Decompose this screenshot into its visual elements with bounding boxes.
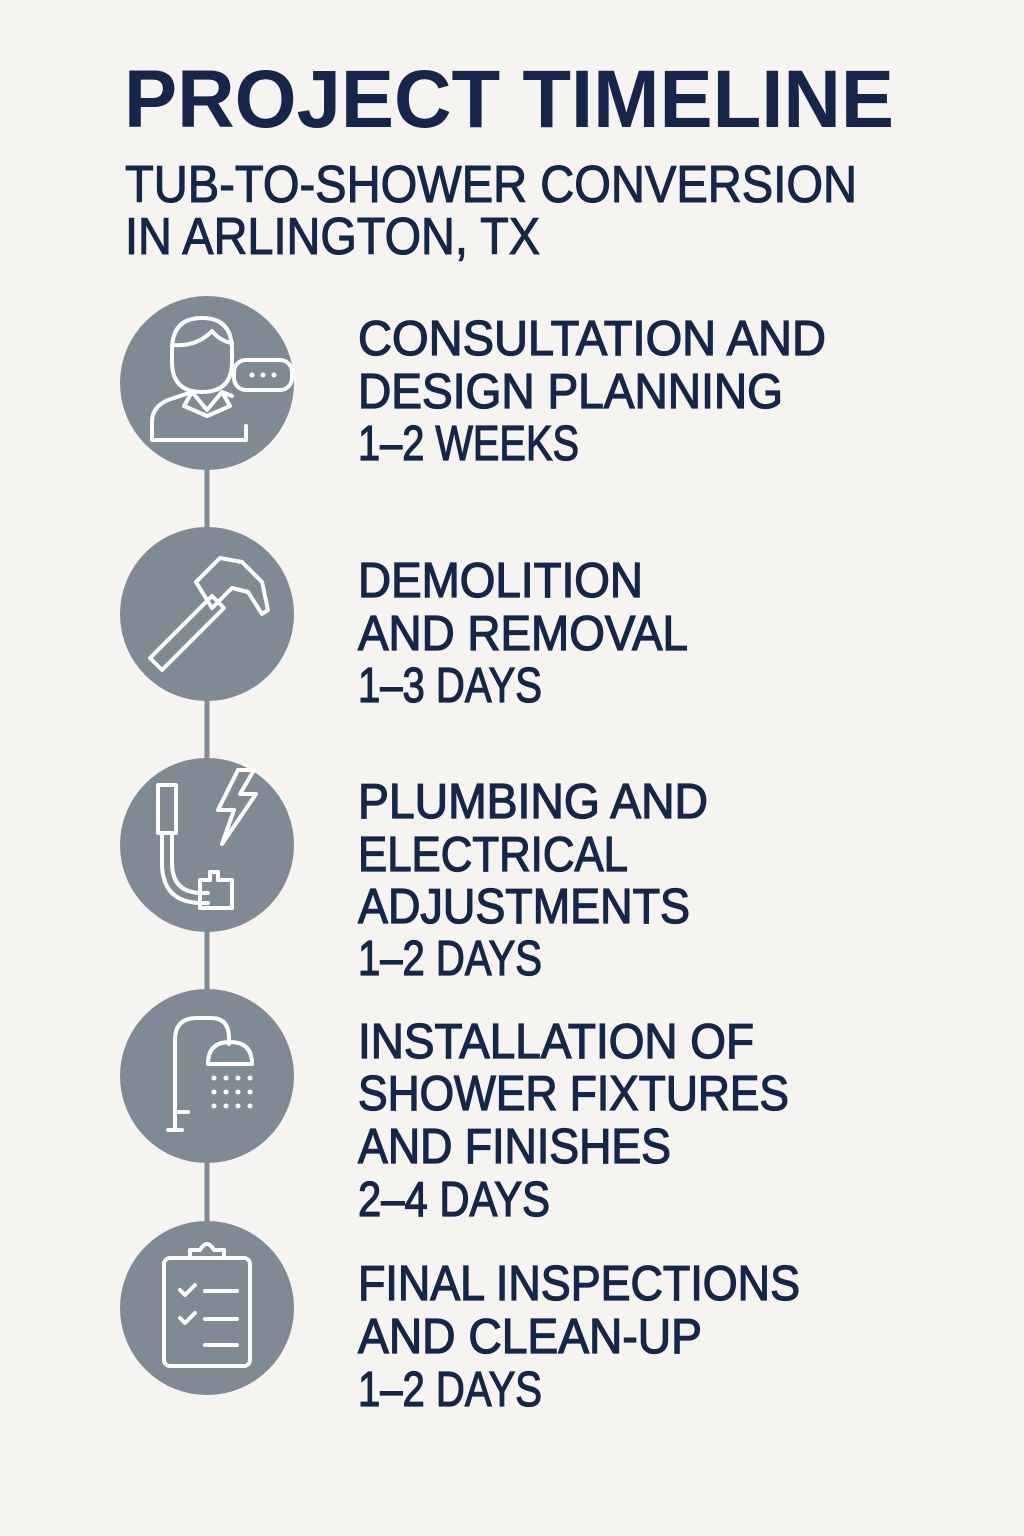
step 3 text — [358, 775, 708, 986]
step 5 text — [358, 1257, 800, 1417]
step 1 text: 1–2 WEEKS — [358, 417, 579, 471]
subtitle: IN ARLINGTON, TX — [125, 208, 540, 266]
title: PROJECT TIMELINE — [124, 54, 894, 145]
step 3 icon: plumbing and electrical — [120, 758, 294, 932]
step 4 icon: shower — [120, 989, 294, 1163]
step 3 text: 1–2 DAYS — [358, 932, 542, 986]
step 1 icon: consultant — [120, 296, 294, 470]
step 5 text: 1–2 DAYS — [358, 1363, 542, 1417]
step 2 icon: hammer — [120, 527, 294, 701]
step 1 text: CONSULTATION AND — [358, 312, 826, 366]
step 3 text: PLUMBING AND — [358, 775, 708, 829]
step 3 text: ELECTRICAL — [358, 828, 628, 882]
step 5 text: AND CLEAN-UP — [358, 1310, 702, 1364]
step 5 text: FINAL INSPECTIONS — [358, 1257, 800, 1311]
step 2 text: DEMOLITION — [358, 554, 643, 608]
step 4 text: SHOWER FIXTURES — [358, 1067, 789, 1121]
step 4 text: INSTALLATION OF — [358, 1015, 754, 1069]
step 1 text: DESIGN PLANNING — [358, 365, 783, 419]
subtitle — [125, 156, 857, 266]
step 2 text: 1–3 DAYS — [358, 659, 542, 713]
step 4 text: 2–4 DAYS — [358, 1173, 550, 1227]
step 1 text — [358, 312, 826, 471]
step 4 text — [358, 1015, 789, 1227]
step 3 text: ADJUSTMENTS — [358, 880, 690, 934]
step 4 text: AND FINISHES — [358, 1120, 671, 1174]
subtitle: TUB-TO-SHOWER CONVERSION — [125, 156, 857, 214]
step 2 text — [358, 554, 688, 713]
step 2 text: AND REMOVAL — [358, 607, 688, 661]
timeline connector — [204, 383, 210, 1308]
step 5 icon: clipboard — [120, 1221, 294, 1395]
